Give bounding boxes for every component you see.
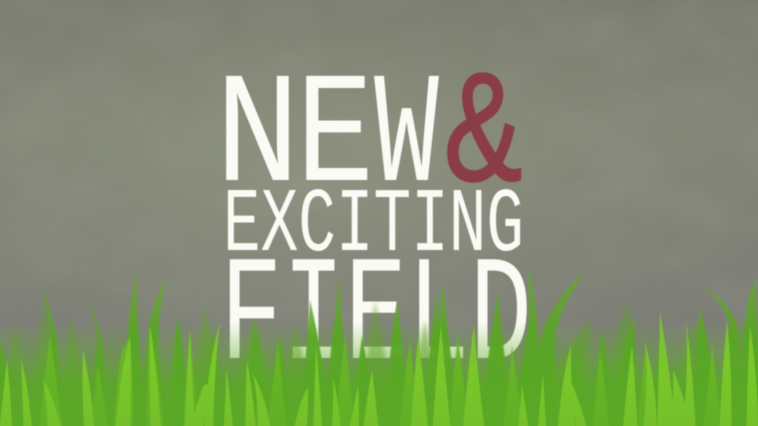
title bbox=[215, 41, 532, 404]
ampersand: & bbox=[444, 41, 522, 213]
grass: distant blurred blades bbox=[2, 295, 758, 426]
title word: NEW bbox=[215, 49, 439, 228]
title word: EXCITING: EXCITING bbox=[223, 175, 524, 278]
title word: NEW: N bbox=[215, 49, 300, 228]
grass: mid-bright blades bbox=[38, 325, 722, 426]
grass: mid-ground blades bbox=[0, 265, 758, 426]
title word: FIELD: FIELD bbox=[220, 234, 532, 404]
grass: bright foreground blades bbox=[0, 312, 758, 426]
title word: NEW: E bbox=[296, 49, 374, 228]
title word: NEW: W bbox=[374, 49, 439, 228]
grass: solid base fill bbox=[0, 322, 758, 426]
